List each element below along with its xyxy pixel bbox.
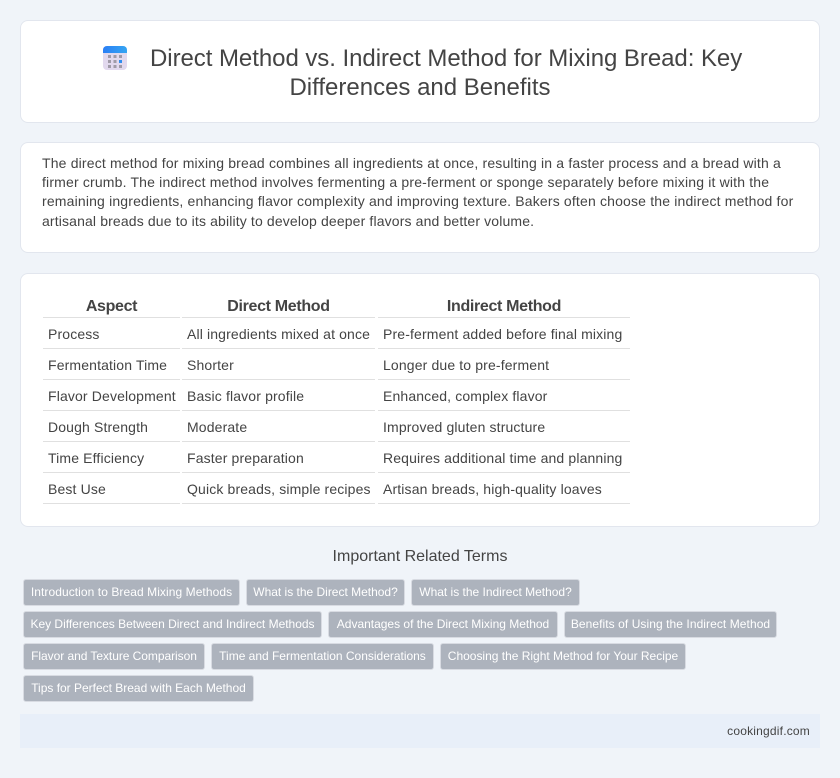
table: comparison: Flavor Development [48,388,176,404]
table: comparison: Requires additional time and planning [383,450,622,466]
tags: related terms: Introduction to Bread Mixing Methods [31,585,232,599]
table: comparison: Fermentation Time [48,357,167,373]
heading: title line 2: Differences and Benefits [289,74,551,101]
table: comparison: Pre-ferment added before final mixing [383,326,622,342]
table: comparison: Enhanced, complex flavor [383,388,547,404]
tags: related terms: What is the Indirect Method? [419,585,572,599]
table: comparison: Direct Method [227,298,330,315]
icon: calendar [103,46,127,70]
heading: important related terms: Important Related Terms [333,548,507,565]
text block: introduction: artisanal breads due to its ability to develop deeper flavors and better volume. [42,213,534,229]
table: comparison: Basic flavor profile [187,388,304,404]
text block: introduction [42,155,794,229]
panel: comparison table [20,273,820,527]
table: comparison: Dough Strength [48,419,148,435]
text block: introduction: remaining ingredients, enhancing flavor complexity and improving texture. Bakers often choose the indirect method for [42,193,793,209]
tags: related terms: Flavor and Texture Comparison [31,649,197,663]
tags: related terms [23,579,777,702]
table: comparison: Process [48,326,100,342]
tags: related terms: What is the Direct Method? [253,585,398,599]
tags: related terms: Choosing the Right Method for Your Recipe [448,649,678,663]
tags: related terms: Benefits of Using the Indirect Method [571,617,770,631]
footer: source: cookingdif.com [727,724,810,738]
table: comparison: Moderate [187,419,247,435]
table: comparison: Quick breads, simple recipes [187,481,371,497]
panel: title header [20,20,820,123]
table: comparison: All ingredients mixed at once [187,326,370,342]
table: comparison [43,298,630,504]
tags: related terms: Key Differences Between Direct and Indirect Methods [30,617,315,631]
panel: introduction [20,142,820,253]
table: comparison: Faster preparation [187,450,304,466]
text block: introduction: firmer crumb. The indirect method involves fermenting a pre-ferment or sponge separately before mixing it with the [42,174,769,190]
table: comparison: Artisan breads, high-quality loaves [383,481,602,497]
table: comparison: Longer due to pre-ferment [383,357,549,373]
tags: related terms: Time and Fermentation Considerations [219,649,426,663]
table: comparison: Best Use [48,481,106,497]
tags: related terms: Advantages of the Direct Mixing Method [337,617,549,631]
table: comparison: Improved gluten structure [383,419,545,435]
table: comparison: Aspect [86,298,137,315]
table: comparison: Indirect Method [447,298,561,315]
footer bar [20,714,820,748]
table: comparison: Shorter [187,357,234,373]
table: comparison: Time Efficiency [48,450,144,466]
text block: introduction: The direct method for mixing bread combines all ingredients at once, resulting in a faster process and a bread with a [42,155,781,171]
heading: title line 1: Direct Method vs. Indirect Method for Mixing Bread: Key [150,45,742,72]
tags: related terms: Tips for Perfect Bread with Each Method [31,681,246,695]
